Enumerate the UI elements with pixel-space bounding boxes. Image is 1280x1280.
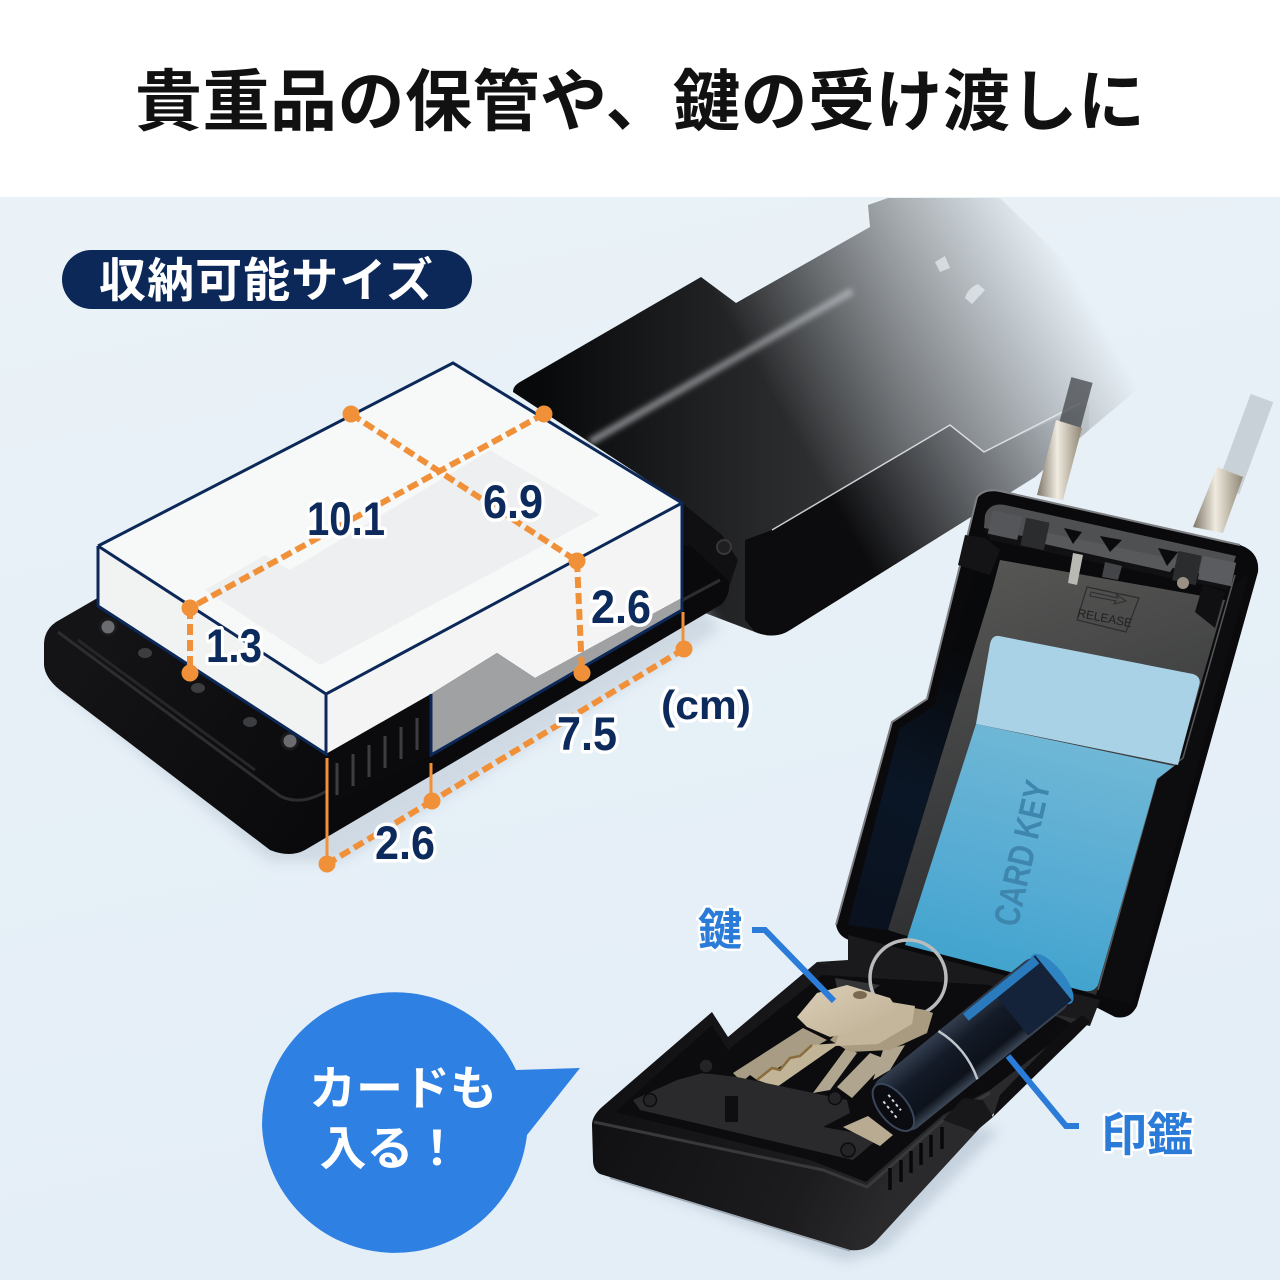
loose key tip [843,1116,893,1146]
release plate [1076,587,1139,632]
label: 7.5: 7.5 [557,707,617,760]
right ferrule [1193,467,1243,533]
lid front lower face [745,403,1089,636]
label: key: 鍵 [698,906,742,955]
inner black plate [633,1073,880,1160]
teeth cut-outs [1064,528,1178,566]
solid leaders [327,612,683,864]
dashed guide: 10.1 [190,414,544,608]
tray shadow [595,1100,1000,1262]
key blade with teeth, second [757,1043,840,1087]
base rim line [58,580,720,800]
locking device base under size box [44,545,729,862]
dashed guide: 2.6 bottom [327,801,432,864]
open device: upper lid [836,490,1258,1018]
lid inner highlight [590,291,852,442]
key ring [870,940,946,1016]
bubble text line 1: カードも [309,1062,497,1115]
dashed guide: 1.3 [187,608,193,673]
size box overlay [98,363,682,800]
lid outer shell [836,490,1258,1018]
label: 2.6 bottom: 2.6 [375,816,435,869]
box front face black notch [326,694,431,800]
ink stamp [863,947,1081,1140]
left side latch [958,535,1000,575]
label: unit cm: (cm) [661,682,751,728]
lid inner grey panel [888,560,1225,995]
dashed guide: 2.6 right [577,561,582,673]
tray interior [615,975,1075,1182]
label: 10.1: 10.1 [307,492,385,545]
open device: lower tray [592,935,1100,1262]
dashed guide: 7.5 [432,649,684,801]
label: 2.6 right: 2.6 [591,580,651,633]
wall rim line [1098,575,1235,990]
screw bosses [1020,518,1202,589]
box front face white part [326,503,682,754]
tray vents [890,1127,942,1190]
vent slots [337,718,417,795]
right cable [1228,398,1262,490]
storage size pill: 収納可能サイズ [99,254,433,307]
back key bows [830,1000,933,1052]
hinge band [984,504,1236,580]
keys [733,985,933,1098]
box top pale details [205,450,600,665]
lid hinge block [684,504,738,586]
small pin [1068,553,1083,585]
screw heads [100,619,298,749]
callout leader: key [752,930,834,1001]
box left face [98,546,326,754]
stamp clear top [992,955,1072,1036]
tray bottom light edge [610,1178,850,1251]
dashed guide: 6.9 [351,414,577,561]
card: blue lower part in sleeve [905,724,1174,991]
latch block [1102,562,1122,580]
stamp ring [938,1028,982,1079]
rear key blades [813,1045,905,1098]
right side latch [1195,585,1225,628]
hinge inner dark gap [984,528,1230,590]
plate screws [644,1059,855,1157]
middle key bow [835,995,915,1046]
lid edge highlight [836,490,1240,925]
cables and metal ferrules [1037,380,1262,533]
box top face [98,363,682,694]
tray front rim [594,1093,990,1187]
label: 1.3: 1.3 [206,619,262,672]
base shadow [50,600,720,862]
right rail [993,1015,1090,1117]
corner block left [988,510,1022,540]
stamp blue reflection [963,956,1039,1021]
lid screw [717,540,731,554]
callout leader: stamp [1008,1056,1079,1126]
open lid of upper device, fading out [513,198,1169,636]
label: 6.9: 6.9 [483,475,543,528]
hinge strip [817,935,1100,1026]
stamp body [869,954,1073,1135]
keyhole [853,991,867,999]
base inner edge [78,640,255,770]
orange end dots [182,406,692,872]
tray inner grey ledge [835,978,880,1000]
key blade with teeth, left [733,1028,827,1082]
box front face grey part [431,598,682,755]
stamp end cap [1023,947,1081,1011]
bubble shape [262,992,580,1253]
teeth strip [1040,532,1178,572]
base body [44,545,729,854]
title: 貴重品の保管や、鍵の受け渡しに [135,65,1145,140]
latch holes [138,648,257,727]
card: pale upper part [976,636,1200,765]
lid body [513,198,1169,636]
label: seal stamp: 印鑑 [1101,1109,1193,1161]
key gold teeth edge [757,1045,812,1080]
release plate: RELEASE [1076,606,1133,630]
corner block right [1198,556,1236,586]
left ferrule [1037,420,1082,500]
left cable [1066,380,1082,440]
tray outer body [592,962,1090,1250]
box navy outlines [98,363,682,755]
front wall flap over stamp [943,1098,993,1132]
stamp face [865,1077,922,1138]
lid front lip edge [772,403,1080,530]
stamp face glint [882,1095,903,1118]
card label: CARD KEY [985,776,1058,930]
lid latch details [935,256,985,304]
right lid wall [1098,572,1250,1005]
speech bubble [262,992,580,1253]
front key bow [797,985,898,1037]
bubble text line 2: 入る！ [320,1122,460,1175]
lid inner wall [848,540,992,930]
plate latch [725,1096,738,1122]
dimension lines [182,406,692,872]
